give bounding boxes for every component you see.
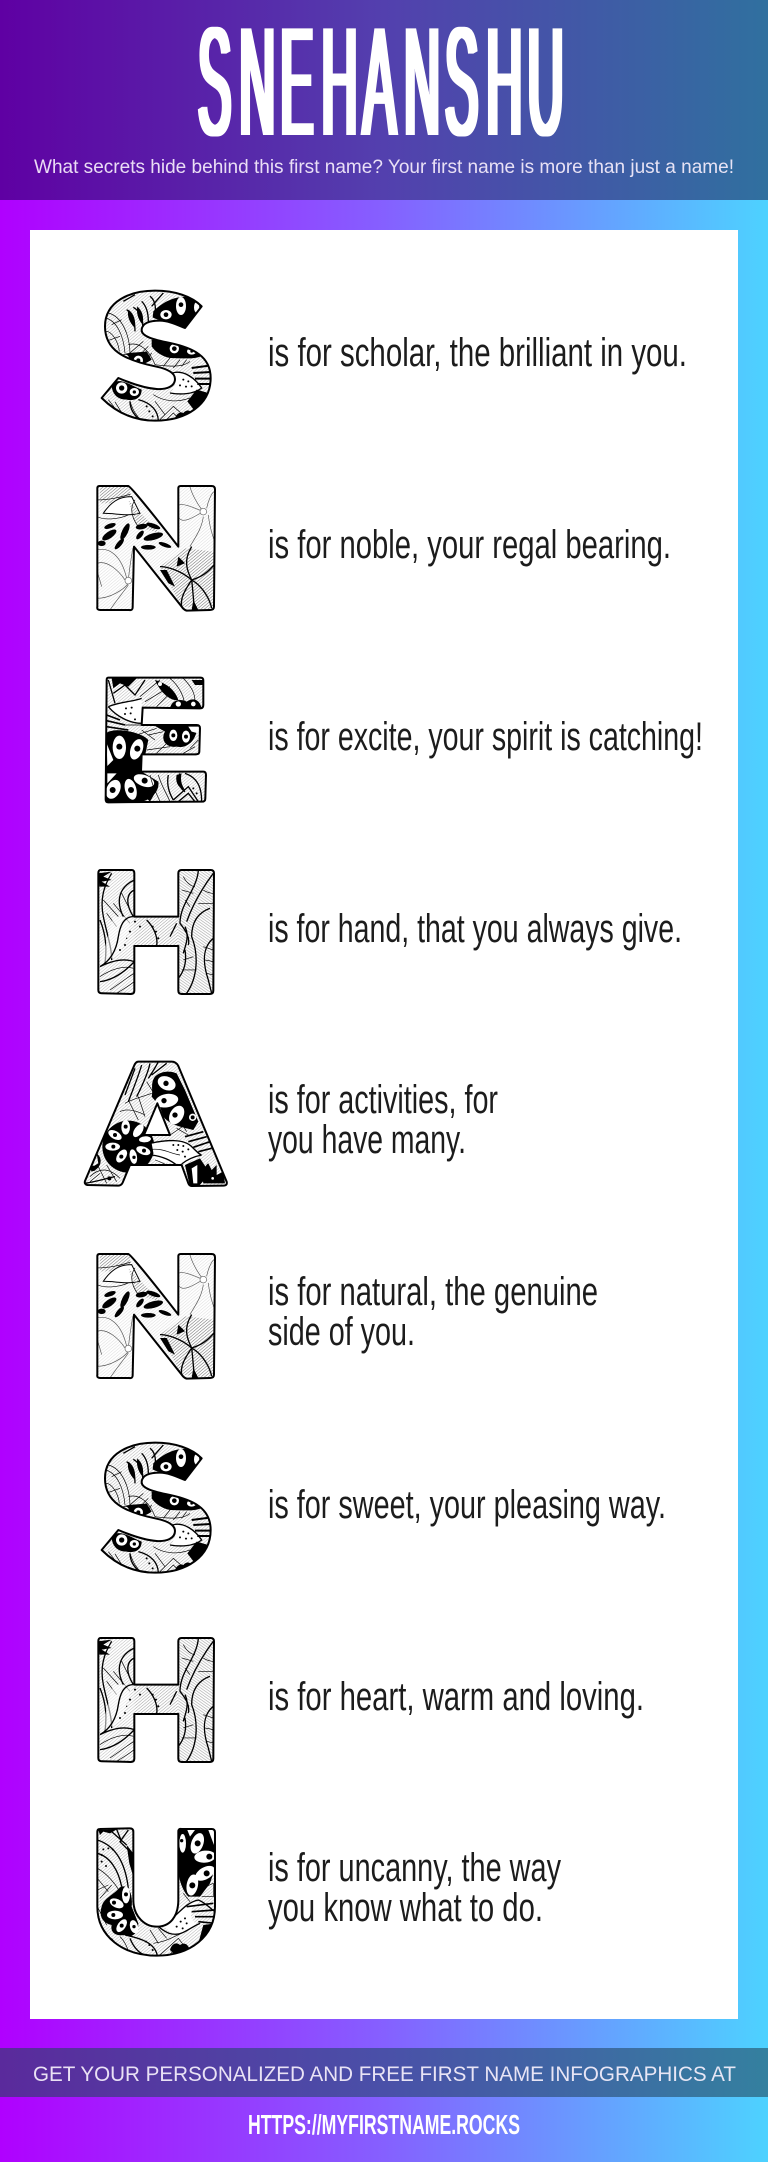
footer call to action: GET YOUR PERSONALIZED AND FREE FIRST NAME INFOGRAPHICS AT xyxy=(33,2062,736,2086)
text: A lines: you have many. xyxy=(268,1118,466,1162)
text: U lines: is for uncanny, the way xyxy=(268,1846,561,1890)
text: U lines: you know what to do. xyxy=(268,1886,543,1930)
text: U lines xyxy=(268,1846,561,1930)
icon: decorated letter H xyxy=(98,1638,214,1762)
footer url: HTTPS://MYFIRSTNAME.ROCKS xyxy=(248,2109,520,2140)
text: N lines: side of you. xyxy=(268,1310,415,1354)
text: A lines xyxy=(268,1078,498,1162)
text: H line: is for heart, warm and loving. xyxy=(268,1675,644,1719)
text: N lines: is for natural, the genuine xyxy=(268,1270,598,1314)
text: N lines xyxy=(268,1270,598,1354)
text: A lines: is for activities, for xyxy=(268,1078,498,1122)
title: SNEHANSHU xyxy=(198,0,564,169)
icon: decorated letter A xyxy=(80,1057,230,1190)
icon: decorated letter H xyxy=(98,870,214,994)
icon: decorated letter N xyxy=(93,483,220,613)
icon: decorated letter S xyxy=(100,290,212,422)
icon: decorated letter E xyxy=(103,675,208,805)
icon: decorated letter U xyxy=(93,1825,218,1958)
icon: decorated letter N xyxy=(93,1251,220,1381)
header band xyxy=(0,0,768,200)
icon: decorated letter S xyxy=(100,1442,212,1574)
white content panel xyxy=(30,230,738,2019)
footer band xyxy=(0,2048,768,2097)
subtitle: What secrets hide behind this first name? Your first name is more than just a name! xyxy=(34,156,734,178)
